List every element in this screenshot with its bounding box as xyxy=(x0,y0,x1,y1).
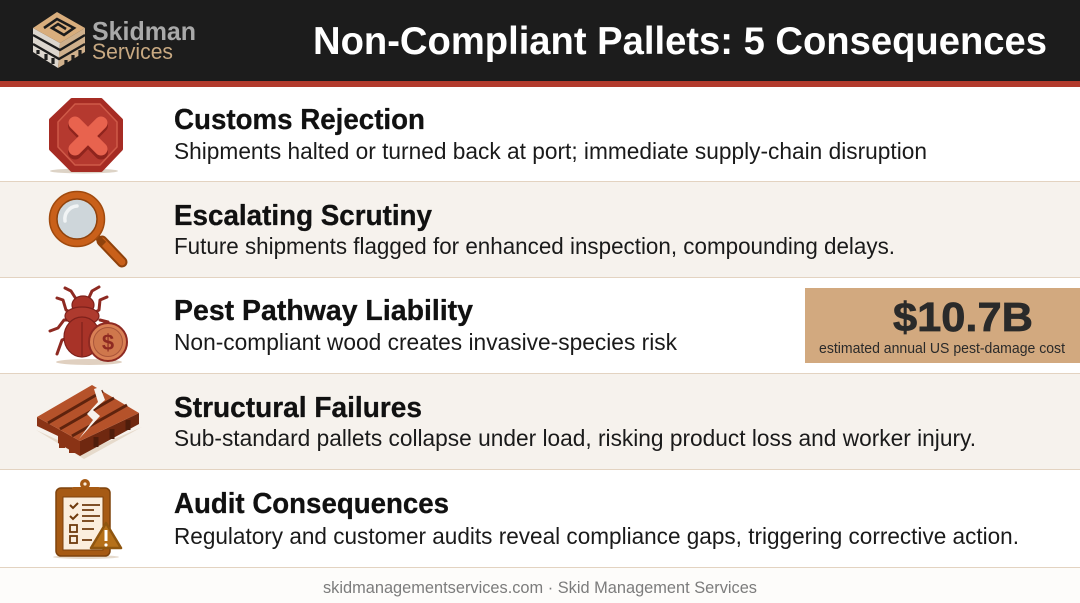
description: Shipments halted or turned back at port; immediate supply-chain disruption xyxy=(174,138,927,164)
icon: beetle with dollar coin: $ xyxy=(102,330,114,355)
heading: Audit Consequences xyxy=(174,488,449,520)
heading: Pest Pathway Liability xyxy=(174,295,473,327)
logo wordmark xyxy=(92,16,196,64)
header bar xyxy=(0,0,1080,87)
logo wordmark: Skidman xyxy=(92,16,196,46)
title: Non-Compliant Pallets: 5 Consequences xyxy=(313,20,1047,63)
stat callout: $10.7B xyxy=(893,294,1033,340)
description: Future shipments flagged for enhanced inspection, compounding delays. xyxy=(174,233,895,259)
icon: broken wooden pallet xyxy=(36,385,142,459)
description: Regulatory and customer audits reveal compliance gaps, triggering corrective action. xyxy=(174,523,1019,549)
description: Sub-standard pallets collapse under load, risking product loss and worker injury. xyxy=(174,425,976,451)
description: Non-compliant wood creates invasive-species risk xyxy=(174,329,677,355)
footer: skidmanagementservices.com · Skid Management Services xyxy=(323,579,757,597)
logo icon: stacked pallets xyxy=(33,12,85,68)
footer xyxy=(0,567,1080,603)
stat callout: estimated annual US pest-damage cost xyxy=(819,341,1065,357)
icon: clipboard checklist with warning xyxy=(53,479,121,559)
icon: magnifying glass xyxy=(50,192,122,262)
row 2: escalating scrutiny xyxy=(0,181,1080,278)
heading: Customs Rejection xyxy=(174,104,425,136)
heading: Escalating Scrutiny xyxy=(174,200,432,232)
stat callout xyxy=(805,288,1080,363)
row 1: customs rejection xyxy=(0,87,1080,181)
row 4: structural failures xyxy=(0,373,1080,470)
icon: red stop octagon with X xyxy=(50,100,121,174)
logo wordmark: Services xyxy=(92,39,173,64)
row 5: audit consequences xyxy=(0,470,1080,567)
row 3: pest pathway liability xyxy=(0,278,1080,374)
heading: Structural Failures xyxy=(174,392,422,424)
icon: beetle with dollar coin xyxy=(50,287,127,365)
